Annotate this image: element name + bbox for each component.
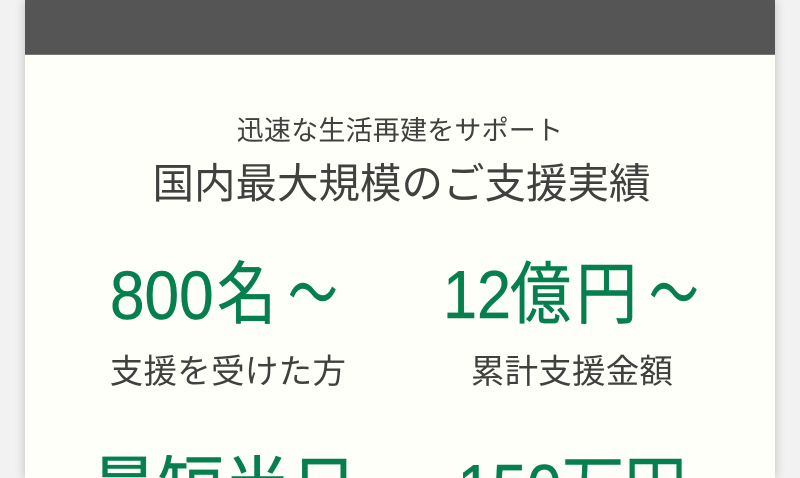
subtitle: 迅速な生活再建をサポート <box>237 116 563 146</box>
stat: total amount: ～ <box>649 257 699 333</box>
stat: total amount <box>443 257 699 333</box>
stat: people supported: ～ <box>288 257 338 333</box>
stat: total amount: 円 <box>576 257 637 333</box>
header bar <box>25 0 775 55</box>
stat: total amount: 億 <box>510 257 571 333</box>
stat: people supported: 名 <box>217 257 276 333</box>
stat: people supported <box>110 257 338 334</box>
title: 国内最大規模のご支援実績 <box>152 160 650 207</box>
stat label: total amount: 累計支援金額 <box>471 354 673 391</box>
stat: people supported: 800 <box>110 257 214 334</box>
stat label: people supported: 支援を受けた方 <box>110 354 346 391</box>
stat: total amount: 12 <box>443 257 511 333</box>
